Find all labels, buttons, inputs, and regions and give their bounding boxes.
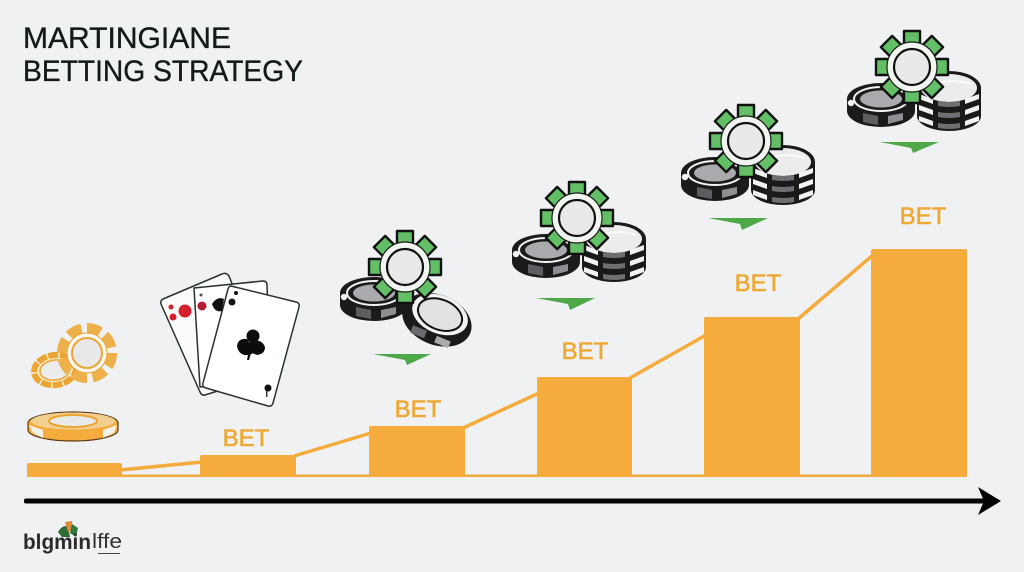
title: MARTINGIANE bbox=[23, 22, 231, 55]
connector line bbox=[120, 255, 873, 470]
green arrow 3 bbox=[708, 218, 768, 230]
bar 5 bbox=[704, 317, 800, 477]
black pips bbox=[212, 298, 224, 311]
back card bbox=[161, 273, 268, 395]
title: BETTING STRATEGY bbox=[23, 55, 303, 88]
green arrow 2 bbox=[536, 298, 595, 310]
bar 1 bbox=[27, 463, 122, 477]
logo: lffe bbox=[92, 531, 122, 553]
bar 4 bbox=[537, 377, 632, 477]
lower pip bbox=[264, 384, 272, 392]
bar chart bbox=[27, 249, 967, 477]
logo underline bbox=[98, 553, 120, 554]
bar 6 bbox=[871, 249, 967, 477]
bet labels: BET bbox=[395, 396, 442, 423]
baseline bbox=[27, 474, 967, 477]
chip pile 1 bbox=[340, 231, 480, 356]
red pips bbox=[178, 304, 192, 318]
timeline arrow bbox=[24, 487, 1001, 515]
chip pile 3 bbox=[681, 105, 815, 205]
front gear chip bbox=[62, 328, 112, 378]
title bbox=[23, 22, 303, 88]
back tilted chip bbox=[32, 352, 78, 388]
icon: orange chips bbox=[28, 328, 118, 441]
bet labels: BET bbox=[900, 203, 947, 230]
club bbox=[237, 330, 265, 360]
icon: leaves bbox=[58, 521, 78, 537]
green arrow 4 bbox=[880, 142, 939, 153]
bet labels: BET bbox=[735, 270, 782, 297]
bet labels: BET bbox=[223, 425, 270, 452]
bar 2 bbox=[200, 455, 296, 477]
flat chip bbox=[28, 412, 118, 441]
green arrow 1 bbox=[373, 354, 431, 365]
logo bbox=[23, 521, 122, 554]
bar 3 bbox=[369, 426, 465, 477]
middle card bbox=[194, 281, 270, 387]
logo text: blgmin bbox=[23, 531, 91, 554]
bet labels: BET bbox=[562, 338, 609, 365]
icon: playing cards bbox=[161, 273, 299, 406]
front card bbox=[203, 286, 299, 406]
chip pile 4 bbox=[847, 31, 981, 131]
bet labels bbox=[223, 203, 947, 452]
chip pile 2 bbox=[512, 182, 646, 282]
